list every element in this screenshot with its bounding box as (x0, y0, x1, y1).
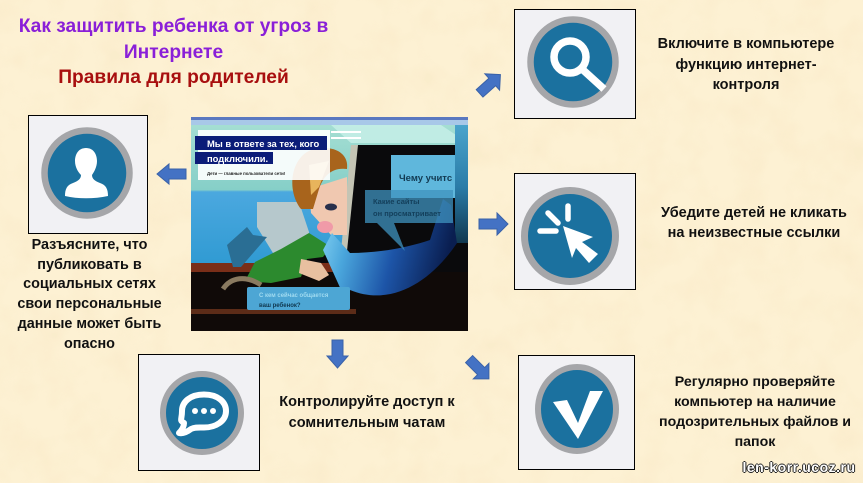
desk (191, 263, 351, 272)
text: internet control: функцию интернет- (675, 56, 817, 72)
text: personal data: опасно (64, 336, 115, 352)
text: personal data: данные может быть (18, 316, 161, 332)
callout: what sites (365, 190, 453, 251)
text: dubious chats: Контролируйте доступ к (279, 394, 455, 410)
title: Как защитить ребенка от угроз в (19, 16, 328, 37)
slogan (195, 130, 330, 180)
title: Правила для родителей (58, 67, 289, 88)
panel: user icon (28, 115, 148, 234)
panel: check icon (518, 355, 635, 470)
text: unknown links (661, 205, 847, 241)
text: dubious chats (279, 394, 455, 430)
monitor edge (341, 145, 358, 251)
callout: what is the child learning: Чему учитс (399, 173, 452, 184)
text: personal data: социальных сетях (23, 276, 156, 292)
chair (257, 202, 309, 253)
text: unknown links: Убедите детей не кликать (661, 205, 847, 221)
text: suspicious files: Регулярно проверяйте (675, 374, 835, 390)
text: internet control: контроля (713, 77, 779, 93)
slogan: Мы в ответе за тех, кого (207, 138, 320, 149)
callout: what sites: Какие сайты (373, 197, 420, 206)
callout: who is the child talking to: С кем сейчас общается (259, 292, 329, 299)
text: personal data (17, 237, 162, 352)
title: Интернете (124, 42, 223, 62)
text: suspicious files: папок (735, 434, 775, 450)
text: suspicious files: компьютер на наличие (674, 394, 836, 410)
slogan: Дети — главные пользователи сети! (207, 171, 286, 176)
panel: chat icon (138, 354, 260, 471)
text: unknown links: на неизвестные ссылки (668, 225, 840, 241)
panel: search icon (514, 9, 636, 119)
monitor backdrop (455, 125, 468, 331)
head (309, 177, 347, 235)
slogan: подключили. (207, 153, 268, 164)
text: personal data: свои персональные (17, 296, 162, 312)
text: internet control (658, 36, 834, 93)
text: suspicious files: подозрительных файлов и (659, 414, 851, 430)
central illustration: child at computer (191, 117, 468, 331)
text: personal data: Разъясните, что (32, 237, 147, 253)
arm and sweater (245, 233, 331, 283)
pen on desk (223, 279, 261, 289)
text: personal data: публиковать в (37, 257, 142, 273)
blue swoosh arrow (323, 199, 457, 303)
watermark: len-korr.ucoz.ru (742, 459, 856, 475)
text: internet control: Включите в компьютере (658, 36, 834, 52)
panel: cursor icon (514, 173, 636, 290)
callout: what sites: он просматривает (373, 209, 441, 218)
callout: what is the child learning (391, 155, 455, 198)
text: suspicious files (659, 374, 851, 450)
text: dubious chats: сомнительным чатам (289, 414, 445, 430)
title (19, 16, 328, 88)
callout: who is the child talking to: ваш ребенок? (259, 302, 301, 309)
callout: who is the child talking to (247, 287, 350, 310)
